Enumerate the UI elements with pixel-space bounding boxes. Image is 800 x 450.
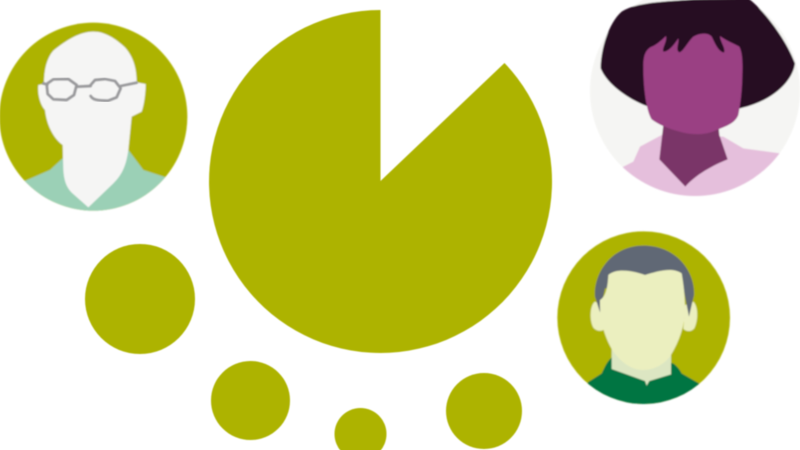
hair [595, 246, 694, 317]
ears [591, 302, 605, 331]
dot: medium left [211, 361, 290, 440]
neck [612, 348, 671, 386]
portrait: bald man with glasses [0, 23, 187, 223]
shirt [588, 358, 699, 412]
face [600, 270, 685, 370]
dot: medium right [446, 373, 522, 449]
dot: small [334, 408, 386, 450]
pie chart [209, 10, 552, 353]
dot: large [85, 244, 195, 354]
hair [601, 0, 795, 108]
face [643, 34, 742, 134]
portrait: man with grey hair [557, 231, 730, 412]
neck [659, 123, 728, 187]
glasses [43, 79, 137, 101]
portrait: woman with dark hair [590, 0, 800, 213]
